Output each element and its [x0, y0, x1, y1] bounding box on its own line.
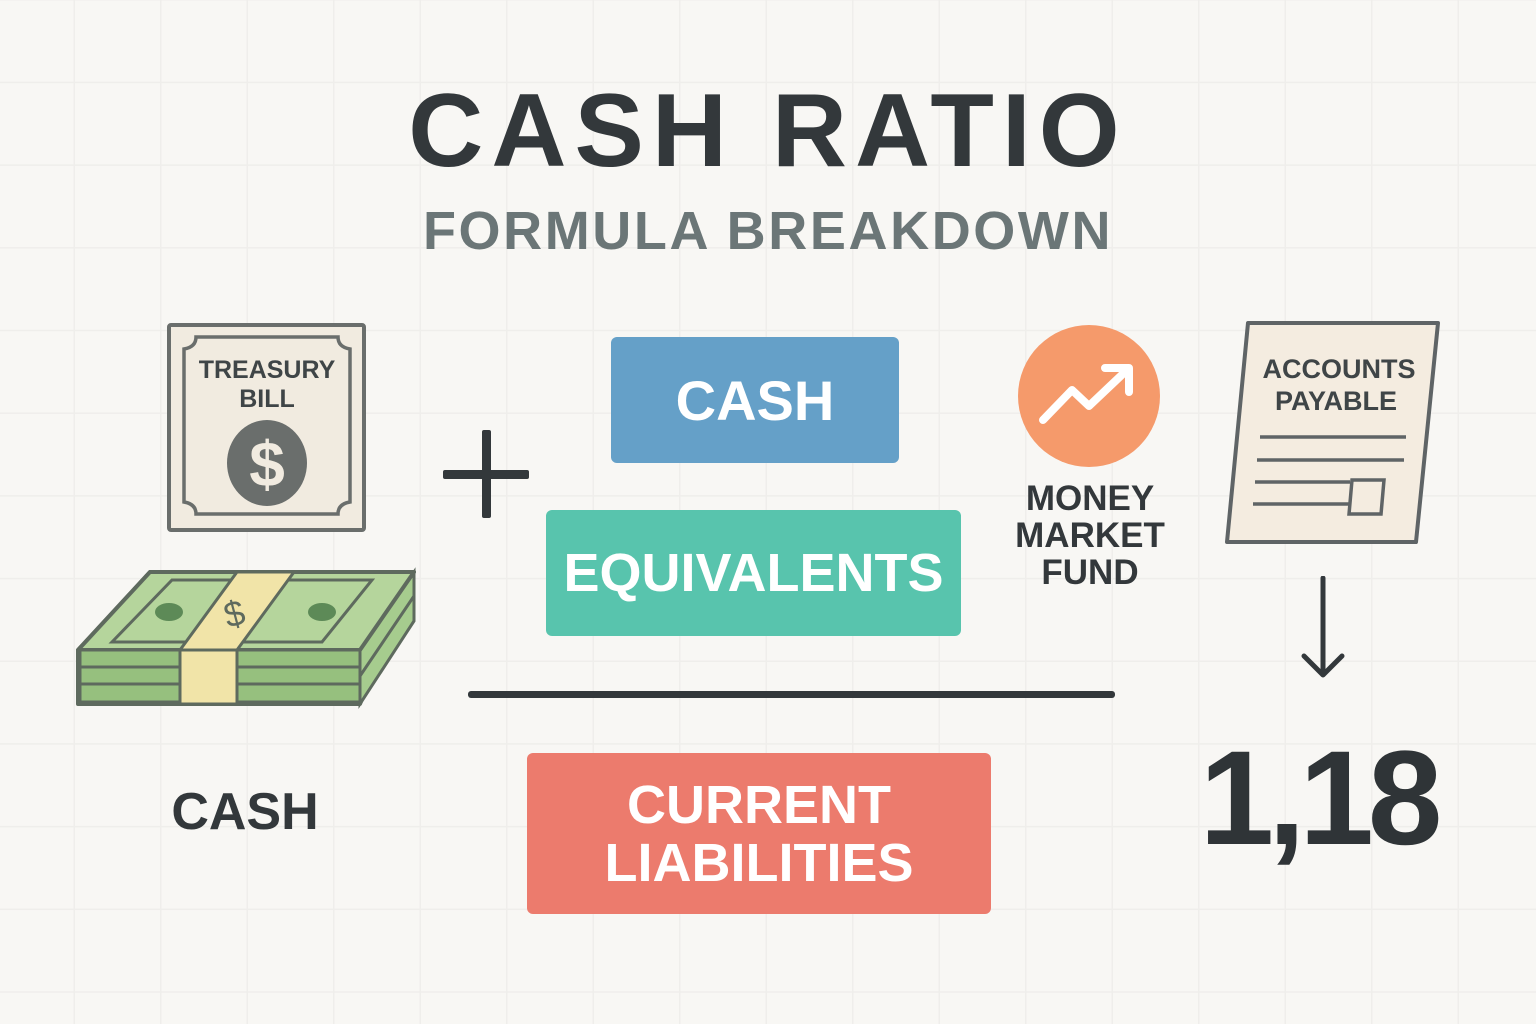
label: money market fund: FUND [1041, 553, 1139, 592]
title: CASH RATIO [408, 73, 1128, 189]
label: cash: CASH [171, 783, 319, 841]
label: money market fund: MARKET [1015, 516, 1165, 555]
icon: cash stack: $ [219, 591, 249, 636]
label: money market fund: MONEY [1026, 479, 1154, 518]
box: equivalents [546, 510, 961, 636]
box: cash [611, 337, 899, 463]
icon: treasury bill: TREASURY [199, 356, 336, 384]
label: money market fund [1015, 479, 1165, 592]
subtitle: FORMULA BREAKDOWN [423, 201, 1113, 261]
icon: money market fund [1018, 325, 1160, 467]
box: cash: CASH [676, 368, 834, 432]
icon: accounts payable document: ACCOUNTS [1262, 354, 1416, 384]
box: equivalents: EQUIVALENTS [563, 543, 944, 603]
icon: accounts payable document: PAYABLE [1275, 386, 1397, 416]
fraction line [468, 691, 1115, 698]
icon: treasury bill [167, 323, 366, 532]
box: current liabilities [527, 753, 991, 914]
icon: cash stack [76, 567, 416, 709]
result value: 1,18 [1200, 724, 1436, 873]
plus sign [443, 430, 529, 518]
icon: accounts payable document [1225, 321, 1440, 544]
box: current liabilities: LIABILITIES [604, 832, 914, 892]
icon: treasury bill: $ [249, 428, 285, 500]
icon: treasury bill: BILL [239, 385, 295, 413]
arrow: down [1302, 576, 1344, 678]
box: current liabilities: CURRENT [627, 774, 891, 834]
